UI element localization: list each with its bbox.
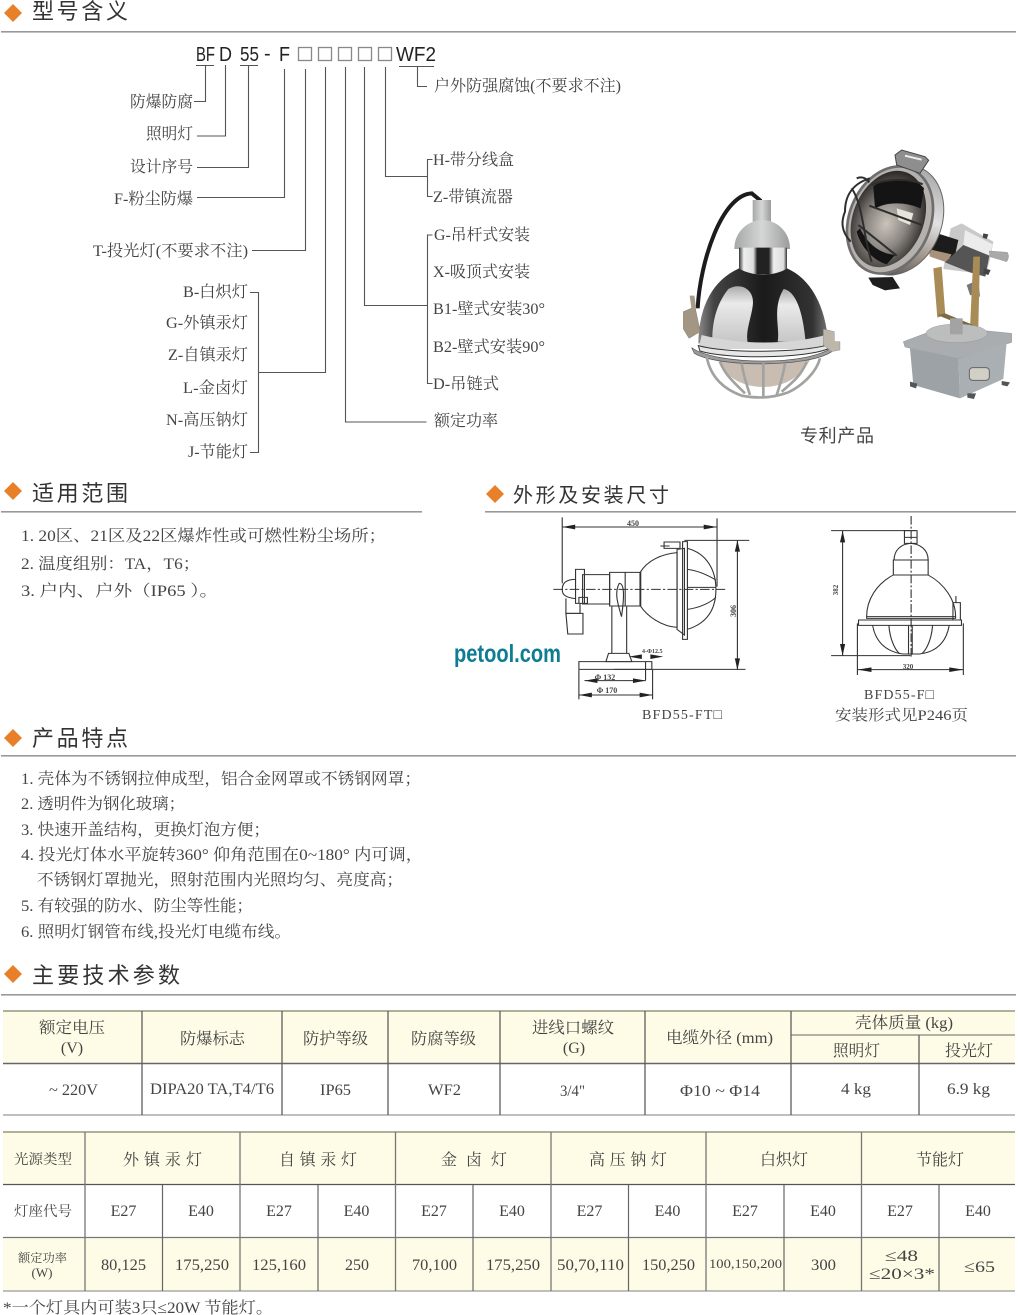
rated power row: 额定功率 (18, 1250, 67, 1265)
watermark: petool.com: petool.com (454, 640, 561, 668)
lamp base row: E27 (421, 1203, 447, 1220)
table header row: 防护等级 (303, 1030, 368, 1048)
table value row: DIPA20 TA,T4/T6 (150, 1081, 274, 1098)
heading: product features: 产品特点 (32, 726, 128, 751)
text block: application scope list: 3. 户内、户外（IP65 ）。 (21, 582, 218, 600)
light source row: 自镇汞灯 (279, 1150, 357, 1169)
heading: application scope (1, 481, 422, 513)
rated power row: 70,100 (412, 1257, 457, 1274)
right labels: 户外防强腐蚀(不要求不注) (434, 76, 621, 95)
table header row: 电缆外径 (mm) (666, 1029, 773, 1047)
rated power row: ≤20×3* (869, 1266, 935, 1283)
text block: product features list: 2. 透明件为钢化玻璃； (21, 795, 185, 813)
right labels: G-吊杆式安装 (434, 226, 530, 244)
drawing: pendant lamp dimensions BFD55-F: 320 (903, 663, 914, 671)
light source row: 白炽灯 (760, 1151, 808, 1169)
drawing: floodlight dimensions BFD55-FT: Φ 170 (597, 686, 617, 695)
heading: outline and installation dimensions: 外形及安装尺寸 (513, 484, 669, 507)
table value row: 6.9 kg (947, 1081, 990, 1098)
left labels: N-高压钠灯 (166, 410, 248, 429)
table value row (49, 1081, 990, 1100)
model code string (196, 43, 436, 66)
text block: product features list: 3. 快速开盖结构，更换灯泡方便； (21, 821, 270, 839)
heading: product features (1, 726, 1016, 757)
rated power row: ≤48 (885, 1248, 918, 1265)
left labels: F-粉尘防爆 (114, 190, 193, 208)
left labels: 防爆防腐 (130, 93, 193, 111)
table header row: 照明灯 (833, 1042, 880, 1060)
right labels: D-吊链式 (433, 375, 499, 393)
table header row: 额定电压 (39, 1019, 105, 1037)
text block: product features list: 6. 照明灯钢管布线,投光灯电缆布线。 (21, 923, 291, 941)
text block: product features list: 5. 有较强的防水、防尘等性能； (21, 897, 253, 915)
right labels: X-吸顶式安装 (433, 263, 530, 281)
right labels: H-带分线盒 (433, 151, 514, 169)
right labels: Z-带镇流器 (433, 187, 513, 206)
model code string: 55 (240, 44, 259, 66)
drawing: floodlight dimensions BFD55-FT (553, 517, 749, 699)
text block: product features list: 不锈钢灯罩抛光，照射范围内光照均匀、亮度高； (37, 870, 403, 889)
rated power row: 150,250 (642, 1257, 695, 1274)
rated power row: 100,150,200 (709, 1256, 782, 1271)
light source row: 高压钠灯 (589, 1150, 667, 1169)
text block: application scope list: 2. 温度组别：TA，T6； (21, 555, 200, 573)
caption: patented product: 专利产品 (800, 426, 874, 446)
heading: main technical parameters: 主要技术参数 (32, 963, 180, 988)
table value row: 3/4" (560, 1083, 585, 1100)
light source row: 节能灯 (916, 1151, 964, 1169)
table: light source types and rated power (3, 1132, 1015, 1291)
light source row: 光源类型 (14, 1151, 72, 1168)
drawing: floodlight dimensions BFD55-FT: 450 (627, 519, 639, 528)
table header row: 防腐等级 (411, 1030, 476, 1048)
label: installation reference: 安装形式见P246页 (835, 707, 968, 724)
table header row: (G) (563, 1040, 585, 1057)
lamp base row (14, 1203, 991, 1220)
photo: pendant lamp (683, 193, 840, 398)
lamp base row: E27 (266, 1203, 292, 1220)
heading: outline and installation dimensions (485, 484, 1016, 513)
left labels: T-投光灯(不要求不注) (93, 242, 248, 260)
left labels: J-节能灯 (188, 443, 248, 461)
light source row: 外镇汞灯 (123, 1150, 202, 1169)
lamp base row: E40 (499, 1203, 525, 1220)
lamp base row: E40 (810, 1203, 836, 1220)
left labels: L-金卤灯 (183, 379, 248, 397)
drawing: pendant lamp dimensions BFD55-F: 382 (832, 584, 840, 595)
drawing: floodlight dimensions BFD55-FT: 4-Φ12.5 (642, 649, 662, 655)
lamp base row: 灯座代号 (14, 1204, 72, 1220)
drawing: floodlight dimensions BFD55-FT: 306 (729, 605, 738, 617)
rated power row: ≤65 (964, 1259, 995, 1276)
rated power row: 50,70,110 (557, 1257, 624, 1274)
heading: model meaning (1, 0, 1016, 33)
label: BFD55-FT: BFD55-FT□ (642, 708, 723, 723)
text block: product features list: 1. 壳体为不锈钢拉伸成型，铝合金网罩或不锈钢网罩； (21, 770, 421, 788)
rated power row: 125,160 (252, 1257, 306, 1274)
model code string: F (279, 44, 290, 66)
left labels: 照明灯 (146, 125, 193, 143)
lamp base row: E27 (577, 1203, 602, 1220)
lamp base row: E40 (344, 1203, 369, 1220)
left labels (93, 93, 248, 461)
table value row: WF2 (428, 1082, 461, 1099)
light source row (14, 1150, 964, 1169)
rated power row: 300 (811, 1257, 836, 1274)
table header row: (V) (61, 1040, 83, 1057)
right labels: 额定功率 (434, 412, 498, 430)
table value row: IP65 (320, 1082, 351, 1099)
drawing: pendant lamp dimensions BFD55-F (831, 516, 963, 675)
rated power row: 175,250 (175, 1257, 229, 1274)
model code diagram (93, 43, 621, 461)
lamp base row: E40 (655, 1203, 680, 1220)
text block: product features list: 4. 投光灯体水平旋转360° 仰角范围在0~180° 内可调， (21, 846, 423, 864)
lamp base row: E27 (887, 1203, 913, 1220)
lamp base row: E27 (732, 1203, 758, 1220)
lamp base row: E27 (111, 1203, 136, 1220)
label: BFD55-F: BFD55-F□ (864, 688, 935, 703)
right labels: B1-壁式安装30° (433, 300, 545, 318)
product photos: patented lamps (683, 150, 1012, 399)
model code string: - (264, 43, 271, 65)
left labels: B-白炽灯 (183, 283, 248, 301)
left labels: Z-自镇汞灯 (168, 345, 248, 364)
lamp base row: E40 (965, 1203, 991, 1220)
left labels: G-外镇汞灯 (166, 313, 248, 332)
right labels: B2-壁式安装90° (433, 338, 545, 356)
table value row: 4 kg (841, 1081, 871, 1098)
table header row: 防爆标志 (180, 1030, 246, 1048)
rated power row (18, 1248, 995, 1283)
lamp base row: E40 (188, 1203, 214, 1220)
table header row: 壳体质量 (kg) (855, 1014, 953, 1032)
right labels (433, 76, 621, 430)
text block: application scope list (21, 527, 386, 600)
rated power row: 175,250 (486, 1257, 540, 1274)
left labels: 设计序号 (130, 158, 193, 176)
model code string: BF (196, 44, 215, 66)
text block: application scope list: 1. 20区、21区及22区爆炸性或可燃性粉尘场所； (21, 527, 386, 545)
table header row (39, 1014, 993, 1060)
table header row: 进线口螺纹 (532, 1019, 614, 1037)
table: electrical and mechanical parameters (3, 1011, 1015, 1115)
table value row: ~ 220V (49, 1082, 98, 1099)
model code string: D (219, 44, 232, 66)
rated power row: 250 (345, 1257, 369, 1274)
heading: application scope: 适用范围 (32, 481, 128, 506)
table header row: 投光灯 (945, 1042, 993, 1060)
drawing: floodlight dimensions BFD55-FT: Φ 132 (595, 673, 615, 682)
rated power row: (W) (32, 1265, 52, 1280)
photo: floodlight lamp (832, 150, 1012, 399)
light source row: 金卤灯 (441, 1151, 507, 1169)
model code string: WF2 (396, 44, 436, 66)
text block: product features list (21, 770, 423, 941)
connector lines (194, 65, 434, 452)
heading: main technical parameters (1, 963, 1016, 996)
rated power row: 80,125 (101, 1257, 146, 1274)
table value row: Φ10 ~ Φ14 (680, 1083, 760, 1100)
